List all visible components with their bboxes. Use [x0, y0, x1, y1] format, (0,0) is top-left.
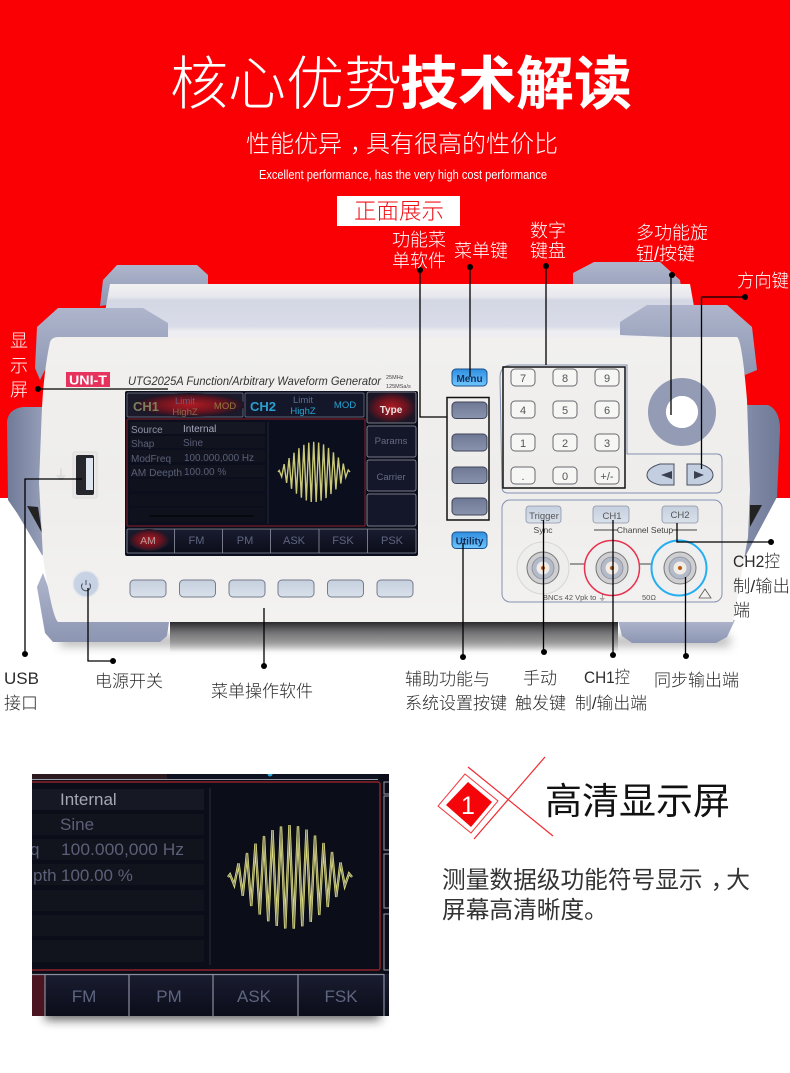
image shadow	[45, 1005, 380, 1020]
numeric keypad: 4	[520, 405, 526, 417]
white labels: 数字	[530, 221, 566, 241]
dark labels: 系统设置按键	[405, 694, 507, 713]
white labels: 显	[10, 331, 28, 351]
model name: 125MSa/s	[386, 384, 411, 390]
model name: UTG2025A Function/Arbitrary Waveform Generator	[128, 374, 382, 388]
table text	[30, 790, 184, 885]
callout lines and dots	[22, 263, 774, 669]
side softkeys: Type	[380, 405, 403, 416]
output panel: Sync	[534, 525, 553, 535]
ch2 status bar: HighZ	[290, 406, 316, 417]
dark labels: CH2控	[733, 552, 780, 571]
dark labels: 菜单操作软件	[211, 682, 313, 701]
feature heading: 高清显示屏	[545, 781, 730, 822]
parameter table: 100.00 %	[184, 467, 226, 478]
model name: 25MHz	[386, 375, 404, 381]
mode tabs	[32, 974, 389, 1016]
numeric keypad: 0	[562, 471, 568, 483]
usb port: ⏚	[54, 467, 68, 483]
menu button: Menu	[456, 374, 483, 385]
numeric keypad	[511, 369, 619, 484]
table text: Internal	[60, 790, 117, 809]
table text: Sine	[60, 815, 94, 834]
numeric keypad: +/-	[600, 471, 614, 483]
menu softkeys row	[130, 580, 413, 597]
ch2 status bar	[245, 393, 364, 417]
white labels	[10, 221, 789, 400]
menu button	[452, 369, 487, 386]
dark labels: 辅助功能与	[405, 670, 490, 689]
side softkeys: Carrier	[376, 472, 406, 483]
dark labels: CH1控	[584, 668, 630, 687]
top bar remnant	[32, 774, 378, 780]
side handle right	[730, 405, 780, 557]
mode tabs: ASK	[237, 987, 272, 1006]
brand logo	[66, 372, 110, 388]
red frame	[24, 782, 380, 970]
numeric keypad: 1	[520, 438, 526, 450]
bnc connectors	[517, 540, 706, 596]
dark labels: 接口	[4, 694, 38, 713]
ch1 status bar: MOD	[214, 401, 236, 412]
side button edges	[384, 782, 389, 970]
parameter table: Shap	[131, 439, 155, 450]
back right bumper	[573, 262, 684, 306]
bottom mode tabs: FM	[189, 535, 204, 547]
bottom mode tabs: PSK	[381, 535, 404, 547]
parameter table: 100.000,000 Hz	[184, 453, 254, 464]
dark labels: 触发键	[515, 694, 566, 713]
section tag: front view: 正面展示	[354, 199, 444, 224]
parameter table: Source	[131, 425, 163, 436]
parameter table: Sine	[183, 438, 203, 449]
front panel body	[39, 337, 750, 622]
table text: 100.000,000 Hz	[61, 840, 184, 859]
feature description: 测量数据级功能符号显示 ，大	[442, 867, 750, 894]
dark labels: 制/输出端	[575, 694, 647, 713]
white labels: 钮/按键	[636, 244, 695, 264]
side handle left	[7, 407, 60, 560]
table text: q	[30, 840, 39, 859]
white labels: 方向键	[737, 271, 789, 291]
bottom mode tabs	[127, 529, 416, 553]
white labels: 键盘	[530, 241, 566, 261]
ch2 status bar: CH2	[250, 399, 276, 414]
grey function keys	[452, 402, 487, 515]
ch1 status bar: Limit	[175, 396, 195, 407]
feature description	[442, 867, 750, 924]
numeric keypad: 2	[562, 438, 568, 450]
dark labels	[4, 552, 790, 713]
table rows	[32, 789, 204, 810]
back left bumper	[100, 265, 208, 306]
parameter table: ModFreq	[131, 454, 171, 465]
dark labels: 同步输出端	[654, 671, 739, 690]
output panel: Channel Setup	[617, 525, 673, 535]
mode tabs: PM	[156, 987, 182, 1006]
ch1 status bar	[127, 393, 245, 418]
output panel: Trigger	[529, 511, 559, 522]
display screen	[125, 391, 418, 556]
waveform	[228, 825, 352, 929]
output panel	[502, 500, 722, 602]
parameter table	[127, 419, 365, 526]
zoomed screen image	[24, 772, 389, 1016]
bottom mode tabs: ASK	[283, 535, 306, 547]
red header background	[0, 0, 790, 498]
dark labels: 端	[733, 601, 750, 620]
output panel: BNCs 42 Vpk to ⏚	[543, 593, 606, 602]
rear top panel	[100, 284, 700, 340]
number badge	[438, 757, 553, 839]
front right bumper	[620, 305, 757, 375]
white labels: 单软件	[392, 251, 446, 271]
side softkeys	[367, 392, 416, 526]
output panel: 50Ω	[642, 593, 656, 602]
dark labels: USB	[4, 669, 39, 688]
dark labels: 制/输出	[733, 577, 790, 596]
rotary knob	[657, 387, 707, 437]
feature description: 屏幕高清晰度。	[442, 897, 608, 924]
numeric keypad: 7	[520, 373, 526, 385]
lower left bumper	[37, 573, 169, 642]
power button	[73, 571, 99, 597]
ch2 status bar: MOD	[334, 400, 356, 411]
bottom mode tabs: AM	[140, 535, 156, 547]
english subtitle: Excellent performance, has the very high cost performance	[259, 167, 547, 182]
section tag: front view	[337, 196, 460, 226]
white labels: 多功能旋	[636, 223, 708, 243]
mode tabs: FSK	[324, 987, 358, 1006]
output panel: CH2	[670, 510, 690, 521]
output panel: CH1	[602, 511, 622, 522]
title: 核心优势	[170, 52, 402, 117]
front left bumper	[35, 308, 168, 380]
numeric keypad: 5	[562, 405, 568, 417]
number badge: 1	[461, 792, 475, 820]
side softkeys: Params	[375, 436, 408, 447]
numeric keypad: .	[521, 471, 525, 483]
keypad panel outline	[500, 365, 722, 493]
white labels: 功能菜	[392, 230, 446, 250]
table text: pth	[33, 866, 57, 885]
bottom mode tabs: FSK	[332, 535, 354, 547]
arrow keys	[647, 464, 713, 485]
white labels: 菜单键	[454, 241, 508, 261]
numeric keypad: 3	[604, 438, 610, 450]
dark labels: 手动	[523, 669, 557, 688]
title: 技术解读	[400, 52, 632, 117]
channel keys	[526, 506, 698, 523]
ch2 status bar: Limit	[293, 395, 313, 406]
parameter table: AM Deepth	[131, 468, 182, 479]
table text: 100.00 %	[61, 866, 133, 885]
brand logo: UNI-T	[69, 374, 107, 388]
numeric keypad: 6	[604, 405, 610, 417]
handle gap right	[750, 505, 762, 527]
lower right bumper	[618, 620, 735, 643]
ch1 status bar: HighZ	[172, 407, 198, 418]
parameter table: Internal	[183, 424, 216, 435]
utility button: Utility	[456, 536, 484, 548]
dark labels: 电源开关	[95, 672, 163, 691]
instrument illustration	[7, 262, 780, 652]
subtitle: 性能优异 ，具有很高的性价比	[246, 131, 558, 158]
waveform preview	[278, 442, 350, 502]
numeric keypad: 8	[562, 373, 568, 385]
floor shadow	[60, 622, 730, 652]
ch1 status bar: CH1	[133, 399, 159, 414]
usb port	[54, 452, 97, 498]
white labels: 屏	[10, 380, 28, 400]
utility button	[452, 532, 487, 548]
numeric keypad: 9	[604, 373, 610, 385]
bottom mode tabs: PM	[237, 535, 253, 547]
mode tabs: FM	[72, 987, 96, 1006]
title	[170, 52, 632, 117]
white labels: 示	[10, 356, 28, 376]
handle gap left	[27, 506, 42, 533]
